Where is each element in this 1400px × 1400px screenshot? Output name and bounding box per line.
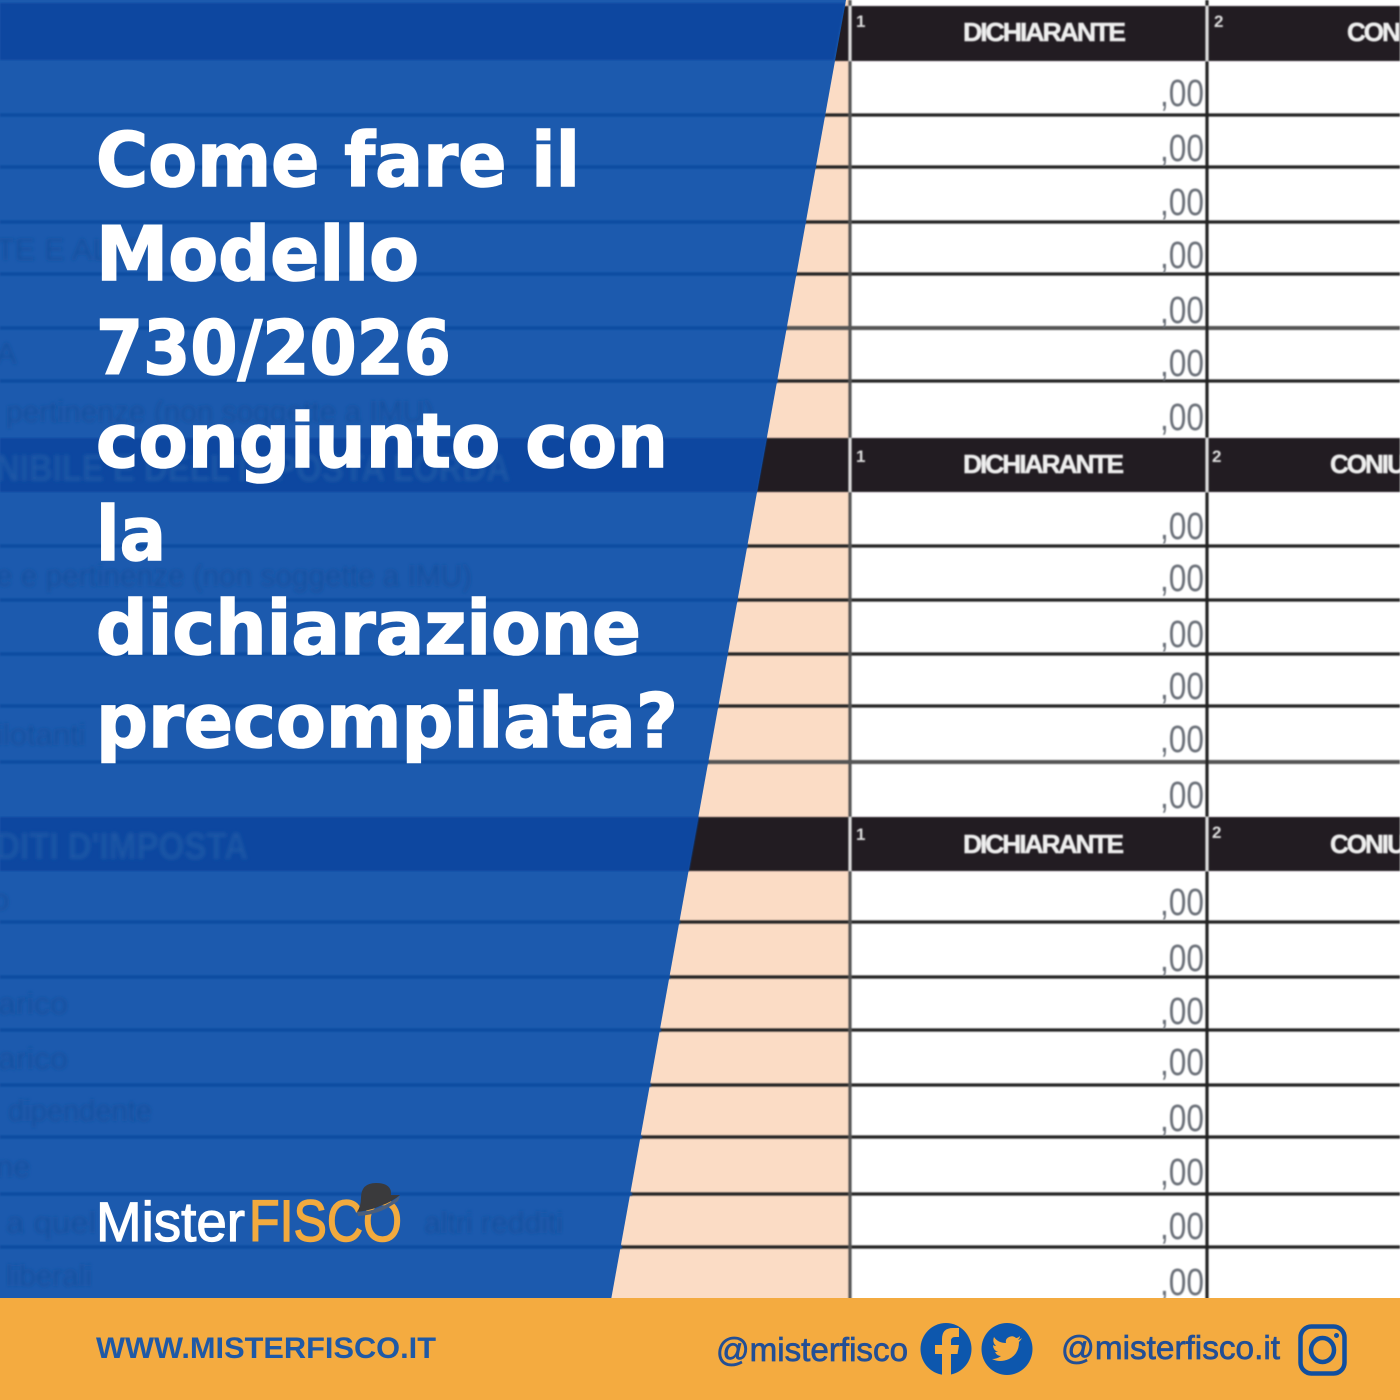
amount placeholders: ,00	[1160, 614, 1204, 656]
amount placeholders: ,00	[1160, 1262, 1204, 1304]
ghost form text: pertinenze (non soggette a IMU)	[6, 394, 434, 429]
column headings: 1	[856, 12, 865, 31]
amount placeholders: ,00	[1160, 1152, 1204, 1194]
darker section bands	[0, 3, 845, 871]
ghost form text: DITI D'IMPOSTA	[0, 826, 248, 868]
ghost form text: a quel	[6, 1205, 96, 1240]
amount placeholders: ,00	[1160, 235, 1204, 277]
column headings: 2	[1212, 447, 1221, 466]
amount placeholders: ,00	[1160, 182, 1204, 224]
ghost form text: arico	[0, 986, 68, 1021]
panel: blue diagonal overlay	[0, 0, 846, 1300]
title: congiunto con	[96, 397, 668, 485]
amount placeholders	[1160, 73, 1204, 1304]
ghost form text: liberali	[6, 1258, 92, 1293]
icon: twitter	[982, 1323, 1032, 1375]
column headings: DICHIARANTE	[963, 17, 1126, 47]
amount placeholders: ,00	[1160, 397, 1204, 439]
icon: bowler hat	[357, 1183, 400, 1216]
instagram handle: @misterfisco.it	[1061, 1329, 1280, 1366]
amount placeholders: ,00	[1160, 938, 1204, 980]
ghost form text: arico	[0, 1041, 68, 1076]
table header bands	[600, 6, 1400, 871]
ghost form text: dipendente	[8, 1093, 152, 1128]
facebook handle: @misterfisco	[716, 1331, 908, 1368]
title: precompilata?	[96, 677, 678, 765]
website: WWW.MISTERFISCO.IT	[96, 1332, 436, 1365]
ghost form text	[0, 232, 563, 1293]
amount placeholders: ,00	[1160, 343, 1204, 385]
title: dichiarazione	[96, 584, 641, 672]
ghost form text: NIBILE E DELL'IMPOSTA LORDA	[0, 448, 510, 490]
column headings: DICHIARANTE	[963, 449, 1124, 479]
title: Modello	[96, 210, 419, 298]
ghost form text: altri redditi	[424, 1205, 563, 1240]
title: Come fare il	[96, 116, 580, 204]
column headings: 2	[1214, 12, 1223, 31]
amount placeholders: ,00	[1160, 882, 1204, 924]
logo: MisterFISCO	[96, 1183, 402, 1254]
amount placeholders: ,00	[1160, 775, 1204, 817]
column headings: 1	[856, 447, 865, 466]
amount placeholders: ,00	[1160, 666, 1204, 708]
column headings: 2	[1212, 823, 1221, 842]
amount placeholders: ,00	[1160, 719, 1204, 761]
amount placeholders: ,00	[1160, 1206, 1204, 1248]
amount placeholders: ,00	[1160, 1098, 1204, 1140]
amount placeholders: ,00	[1160, 991, 1204, 1033]
amount placeholders: ,00	[1160, 558, 1204, 600]
column headings	[856, 12, 1400, 859]
logo: MisterFISCO: Mister	[96, 1190, 245, 1253]
amount placeholders: ,00	[1160, 128, 1204, 170]
ghost form text: TE E ALTRI	[0, 232, 157, 267]
ghost row lines	[0, 115, 825, 1247]
title: la	[96, 490, 166, 578]
table grid lines	[600, 0, 1400, 1300]
amount placeholders: ,00	[1160, 73, 1204, 115]
footer bar	[0, 1298, 1400, 1400]
column headings: CON	[1347, 17, 1400, 47]
icon: facebook	[920, 1323, 972, 1375]
amount placeholders: ,00	[1160, 1042, 1204, 1084]
amount placeholders: ,00	[1160, 290, 1204, 332]
amount placeholders: ,00	[1160, 506, 1204, 548]
icon: instagram	[1300, 1326, 1344, 1374]
title: 730/2026	[96, 304, 451, 392]
column headings: 1	[856, 825, 865, 844]
ghost form text: e e pertinenze (non soggette a IMU)	[0, 558, 472, 593]
logo: MisterFISCO: FISCO	[249, 1189, 402, 1254]
column headings: DICHIARANTE	[963, 829, 1124, 859]
title	[96, 116, 678, 765]
